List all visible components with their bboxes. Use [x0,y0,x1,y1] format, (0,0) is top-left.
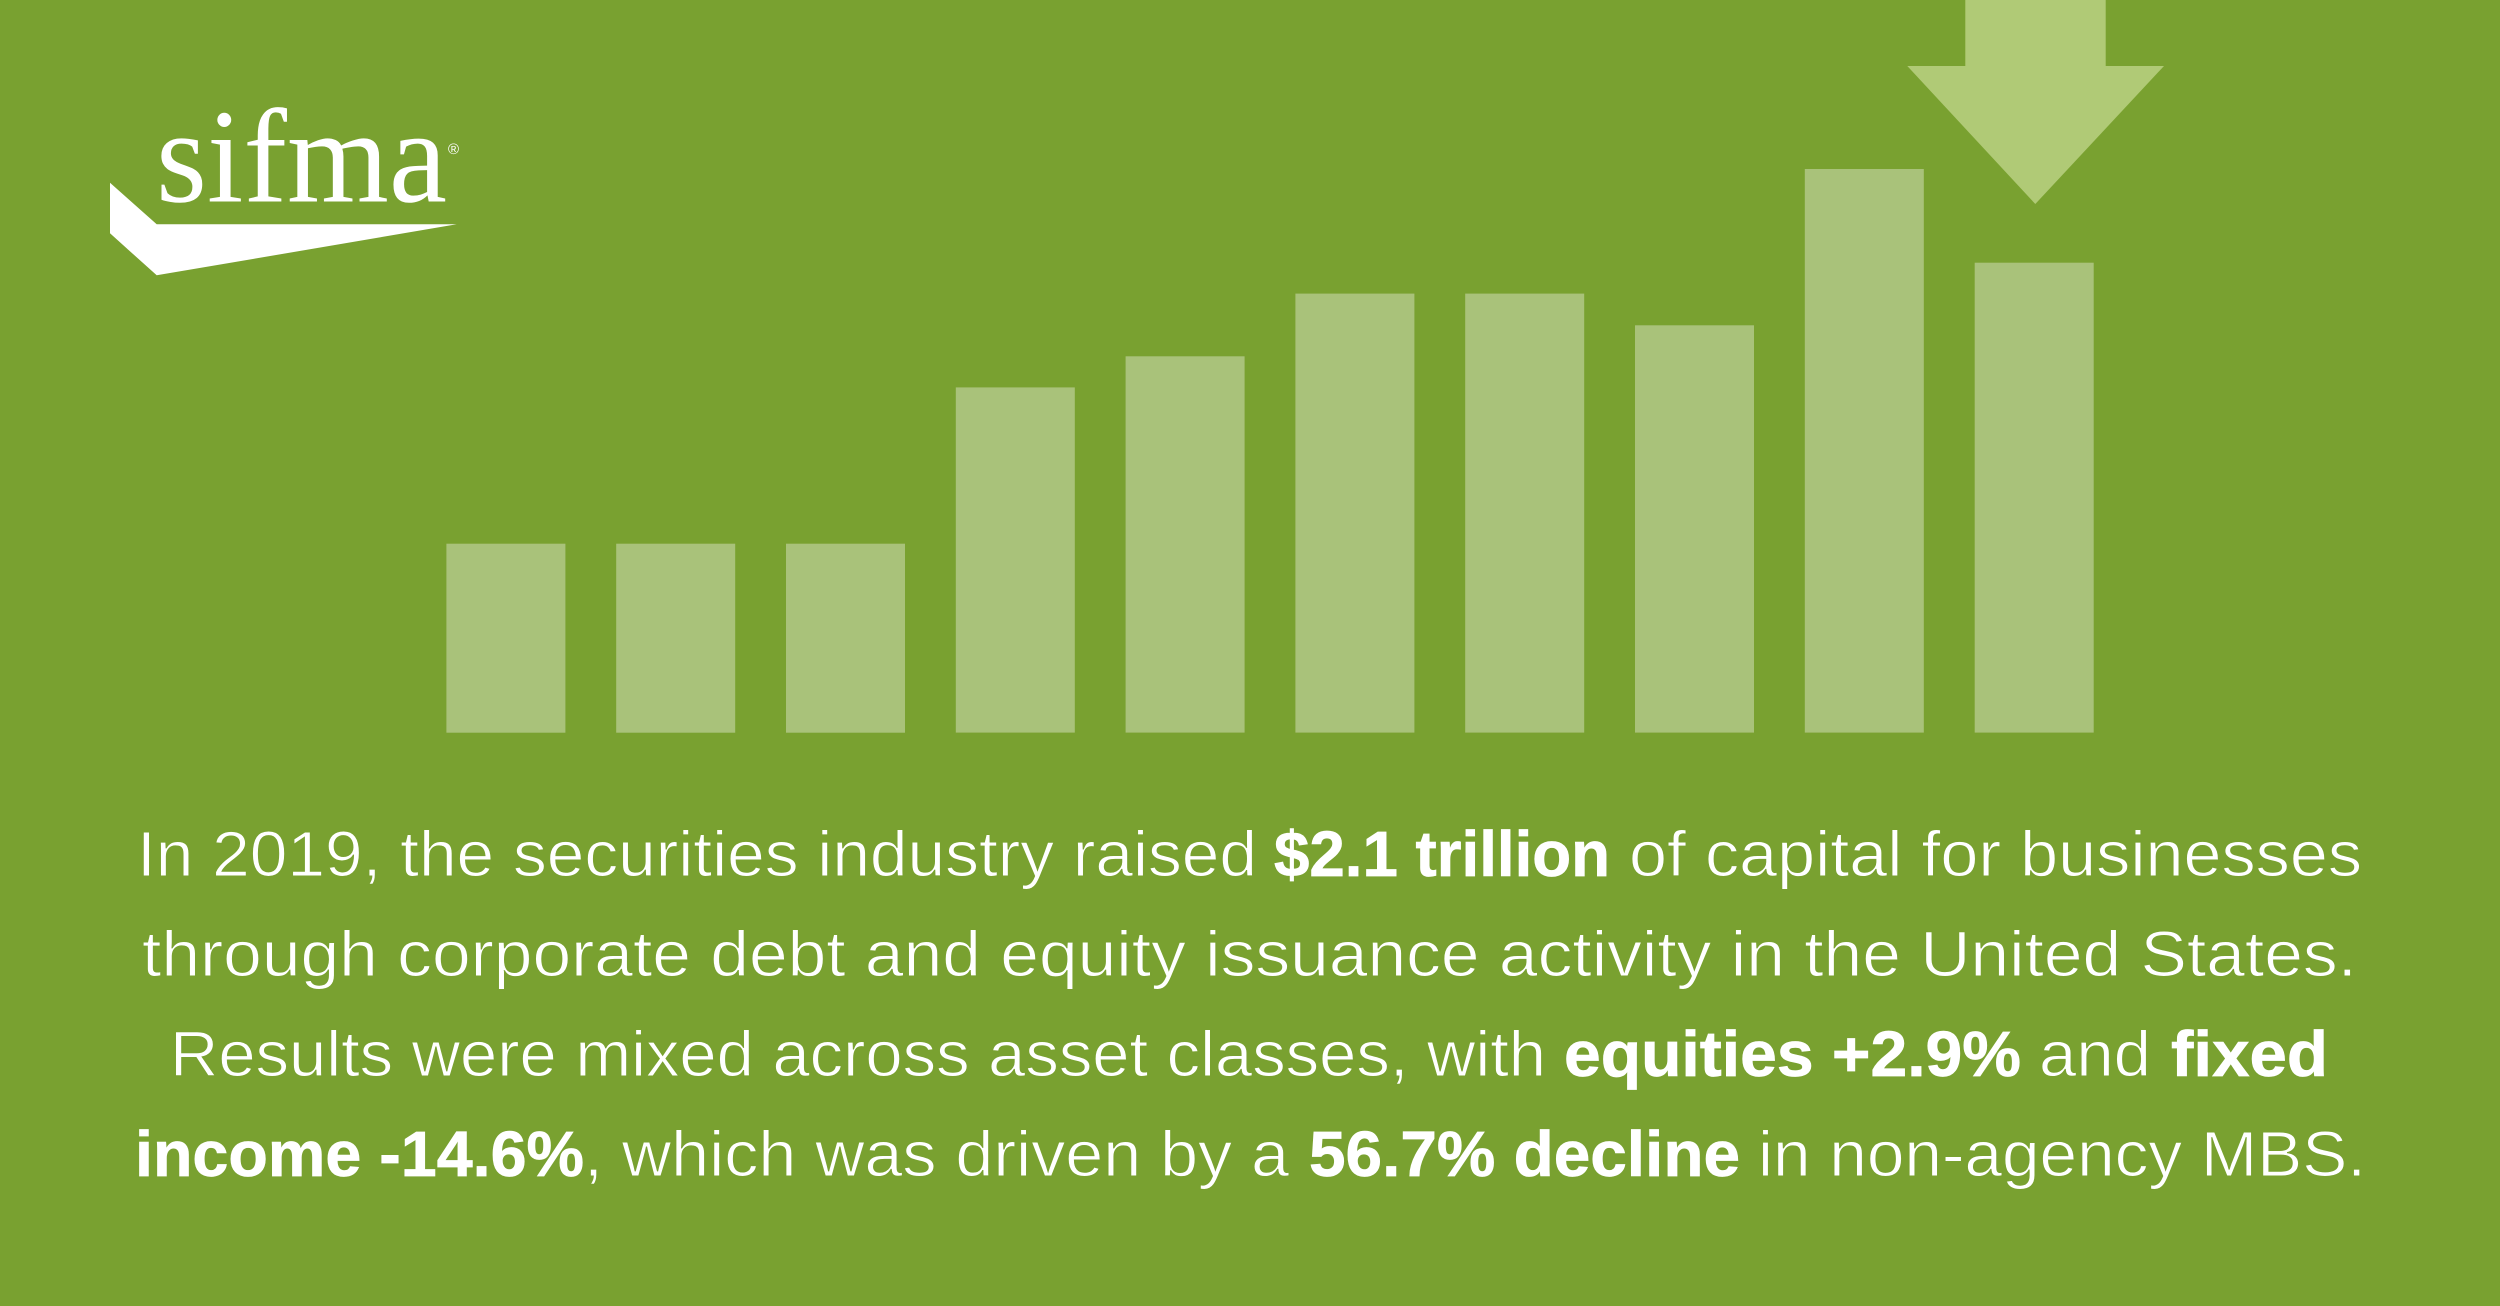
bar 2 [616,544,735,733]
bar 7 [1465,294,1584,733]
line 4: in non-agency MBS. [1758,1118,2366,1190]
bar 3 [786,544,905,733]
line 4: , which was driven by a [584,1118,1289,1190]
logo: sifma [110,82,459,275]
line 1: $2.1 trillion [1274,818,1610,890]
bar 5 [1126,356,1245,733]
line 3: fixed [2171,1018,2328,1090]
line 3: equities +2.9% [1564,1018,2021,1090]
line 4: 56.7% decline [1309,1118,1740,1190]
line 2: through corporate debt and equity issuance activity in the United States. [142,918,2357,990]
bar 9 [1805,169,1924,733]
bar 4 [956,387,1075,733]
text block: summary paragraph [135,818,2366,1190]
line 3: Results were mixed across asset classes, with [170,1018,1546,1090]
bar 6 [1295,294,1414,733]
line 1 [137,818,2362,890]
logo registered mark: ® [448,141,459,158]
line 4 [135,1118,2366,1190]
line 1: of capital for businesses [1629,818,2362,890]
bar 1 [446,544,565,733]
logo swoosh [110,183,457,275]
line 3 [170,1018,2328,1090]
logo wordmark: sifma [156,82,447,230]
bar 10 [1975,263,2094,733]
line 3: and [2039,1018,2151,1090]
icon: down arrow [1907,0,2164,204]
bar 8 [1635,325,1754,733]
line 1: In 2019, the securities industry raised [137,818,1257,890]
line 4: income -14.6% [135,1118,584,1190]
bar chart [446,169,2094,733]
